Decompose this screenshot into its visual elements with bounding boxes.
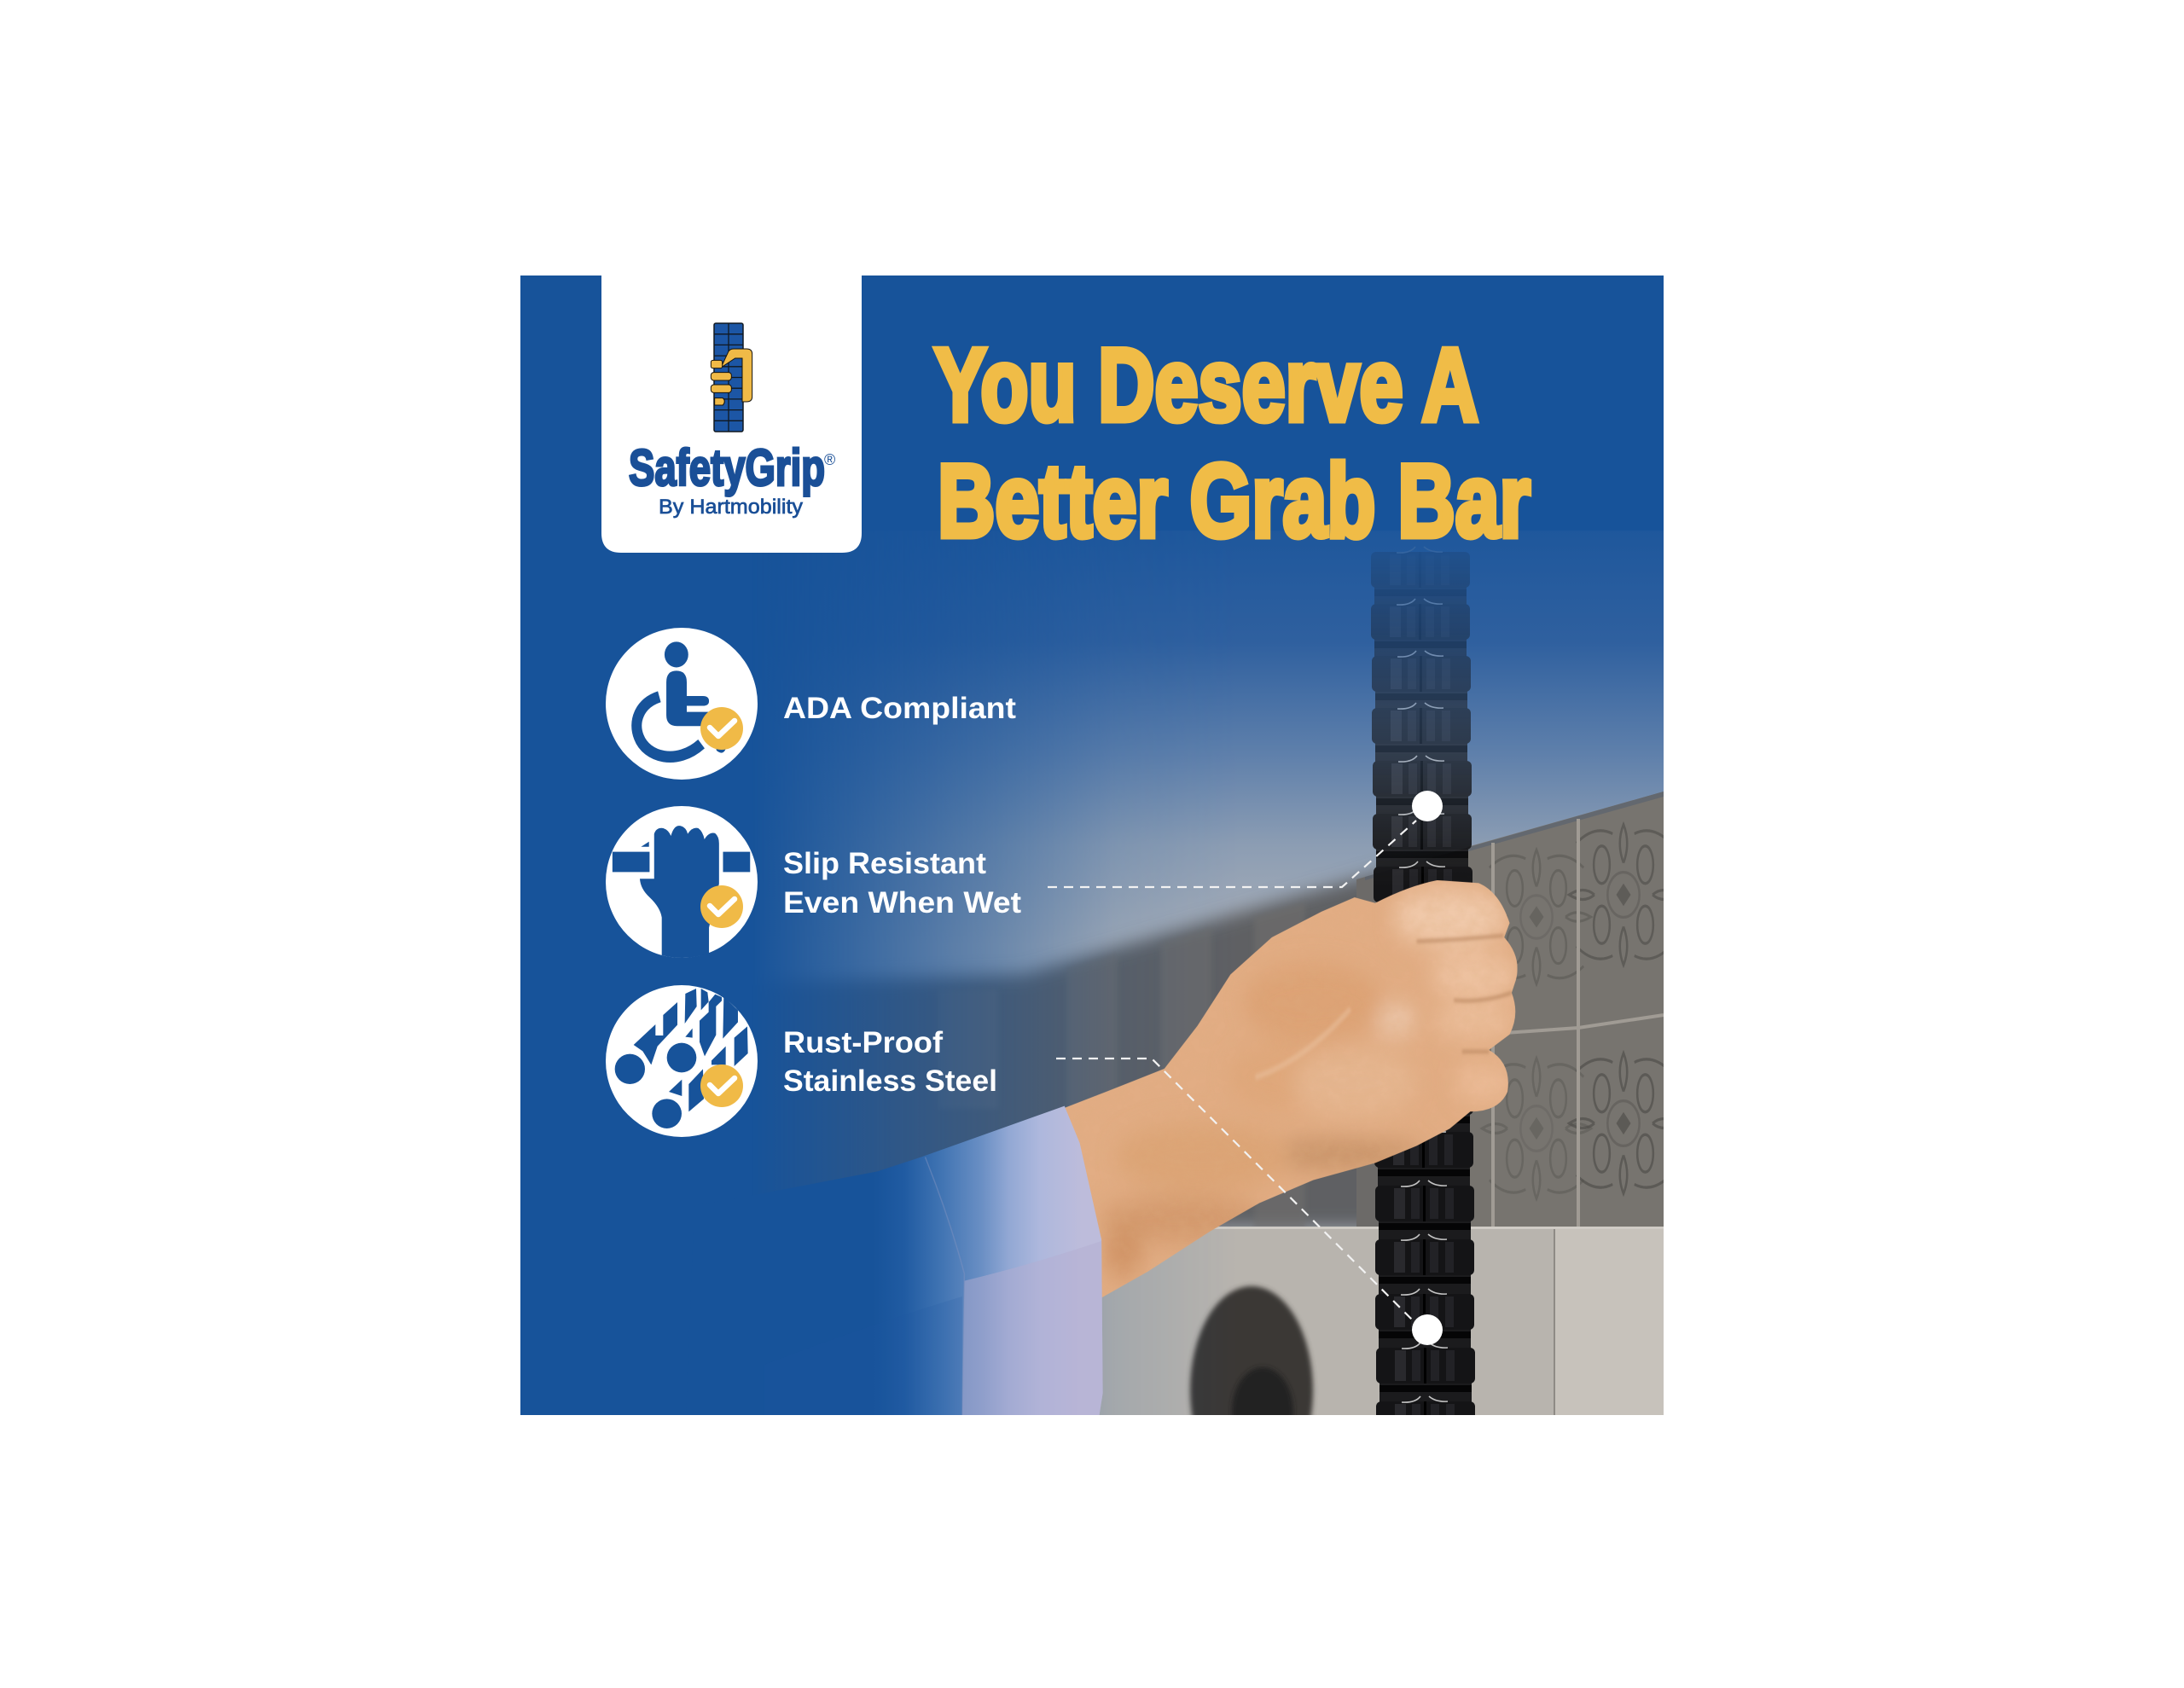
label: Slip Resistant Even When Wet: [783, 847, 1021, 919]
label: Slip Resistant Even When Wet: Slip Resistant: [783, 847, 986, 880]
panel: blue infographic background: [520, 276, 1678, 1494]
title: [934, 327, 1531, 559]
icon: wheelchair: [606, 628, 758, 780]
title: You Deserve A: [934, 327, 1478, 443]
title: Better Grab Bar: [938, 443, 1531, 559]
feature: ADA compliant: [606, 628, 1016, 780]
photo: bathroom wall fading into blue: [776, 536, 1664, 1415]
label: ADA Compliant: ADA Compliant: [783, 692, 1016, 725]
grab bar with knurled grip: [1371, 547, 1475, 1458]
icon: stainless steel bars: [606, 985, 758, 1137]
feature: slip resistant: [606, 806, 1021, 958]
logo icon: hand on grab bar: [711, 323, 752, 432]
callout lines: dashed leaders: [1048, 821, 1416, 1320]
logo tagline: By Hartmobility: [659, 496, 803, 519]
label: Rust-Proof Stainless Steel: Stainless Steel: [783, 1064, 997, 1098]
label: Rust-Proof Stainless Steel: [783, 1026, 997, 1098]
icon: fist gripping bar: [606, 806, 758, 958]
label: Rust-Proof Stainless Steel: Rust-Proof: [783, 1026, 943, 1059]
callout dot: lower: [1412, 1314, 1443, 1345]
logo card: [601, 276, 862, 553]
logo wordmark: SafetyGrip: [629, 439, 825, 496]
feature: rust-proof: [606, 985, 997, 1137]
label: Slip Resistant Even When Wet: Even When Wet: [783, 886, 1021, 919]
callout dot: upper: [1412, 791, 1443, 821]
hand gripping the bar: [1065, 880, 1518, 1298]
sleeve: light lavender shirt cuff: [771, 1105, 1103, 1415]
registered mark: ®: [824, 451, 835, 468]
